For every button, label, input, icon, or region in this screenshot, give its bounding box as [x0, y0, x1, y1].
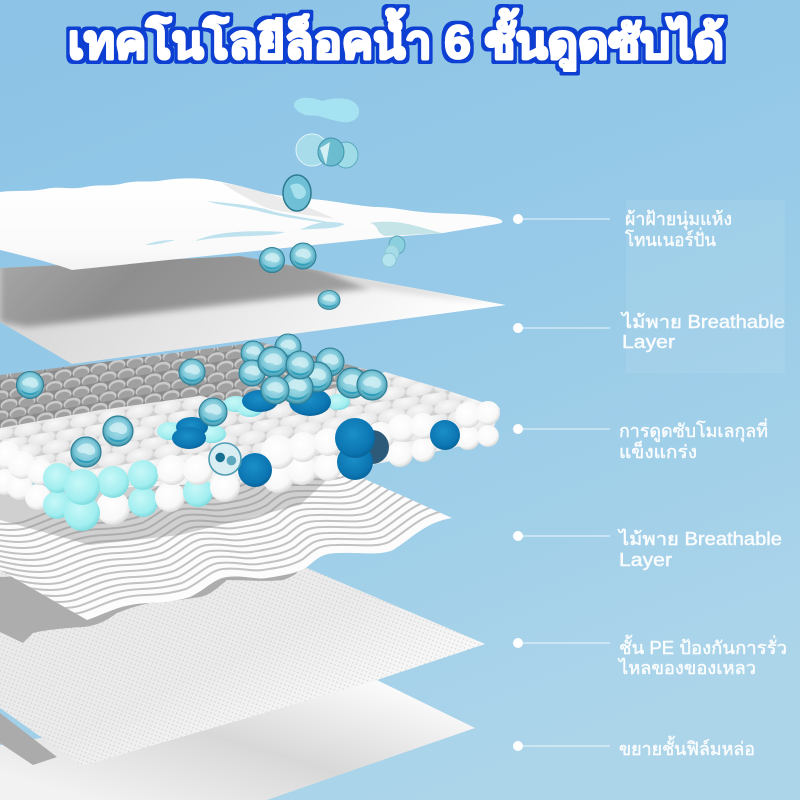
callout: layer 2: Layer	[622, 332, 675, 352]
droplet: above top sheet	[283, 175, 311, 211]
front upper bead row	[0, 401, 500, 505]
front lower bead row	[0, 425, 499, 531]
droplet on grey scales	[179, 359, 205, 385]
callout: layer 1: ผ้าฝ้ายนุ่มแห้ง	[625, 209, 732, 230]
layer 4: wave shadow	[0, 565, 300, 643]
water stains	[145, 201, 442, 245]
callout: layer 6: ขยายชั้นฟิล์มหล่อ	[619, 736, 755, 759]
layer 2: breathable sheet	[0, 250, 506, 364]
callout: layer 3	[513, 418, 768, 462]
droplet: elongated right	[382, 236, 405, 267]
grey scale back surface	[0, 342, 400, 450]
droplets under top sheet	[260, 248, 284, 272]
callout: layer 5: ชั้น PE ป้องกันการรั่ว	[619, 635, 787, 658]
white bead top surface	[0, 372, 500, 490]
layer 6: cast film sheet	[0, 680, 475, 800]
callout: layer 1: โทนเนอร์ปั่น	[625, 227, 716, 250]
callout: layer 4	[513, 528, 782, 570]
droplet: pale top blob	[294, 98, 359, 122]
title: เทคโนโลยีล็อคน้ำ 6 ชั้นดูดซับได้	[68, 8, 724, 71]
droplet: right of centre under sheet	[290, 243, 316, 269]
large blue beads	[238, 418, 460, 487]
droplet: triple lobes	[296, 134, 358, 168]
callout: layer 3: แข็งแกร่ง	[619, 440, 697, 462]
callout: layer 2: ไม้พาย Breathable	[620, 311, 785, 332]
water droplets falling	[16, 98, 405, 475]
translucent label panel	[626, 200, 785, 373]
callout: layer 5: ไหลของของเหลว	[617, 657, 756, 678]
droplet cluster	[239, 334, 387, 404]
droplet front clear	[209, 443, 241, 475]
droplets on bead surface	[16, 372, 44, 398]
droplet: on second sheet	[318, 290, 340, 310]
callout: layer 1	[513, 209, 732, 250]
callout: layer 3: การดูดซับโมเลกุลที่	[619, 418, 768, 442]
droplet over blue patch	[199, 398, 227, 426]
callout: layer 2	[513, 311, 785, 352]
callout: layer 6	[513, 736, 755, 759]
droplet left front	[71, 437, 101, 467]
blue and cyan absorbed patches	[157, 388, 350, 449]
callout: layer 4: ไม้พาย Breathable	[617, 528, 782, 549]
layer 5: PE mesh sheet	[0, 560, 485, 766]
layer 4: wavy breathable sheet	[0, 472, 452, 620]
layer 3: molecular absorbent beads	[0, 342, 500, 531]
callout: layer 4: Layer	[619, 550, 672, 570]
layer 1: soft cotton top sheet	[0, 178, 502, 270]
callout: layer 5	[513, 635, 787, 678]
droplet mid beads	[103, 416, 133, 446]
